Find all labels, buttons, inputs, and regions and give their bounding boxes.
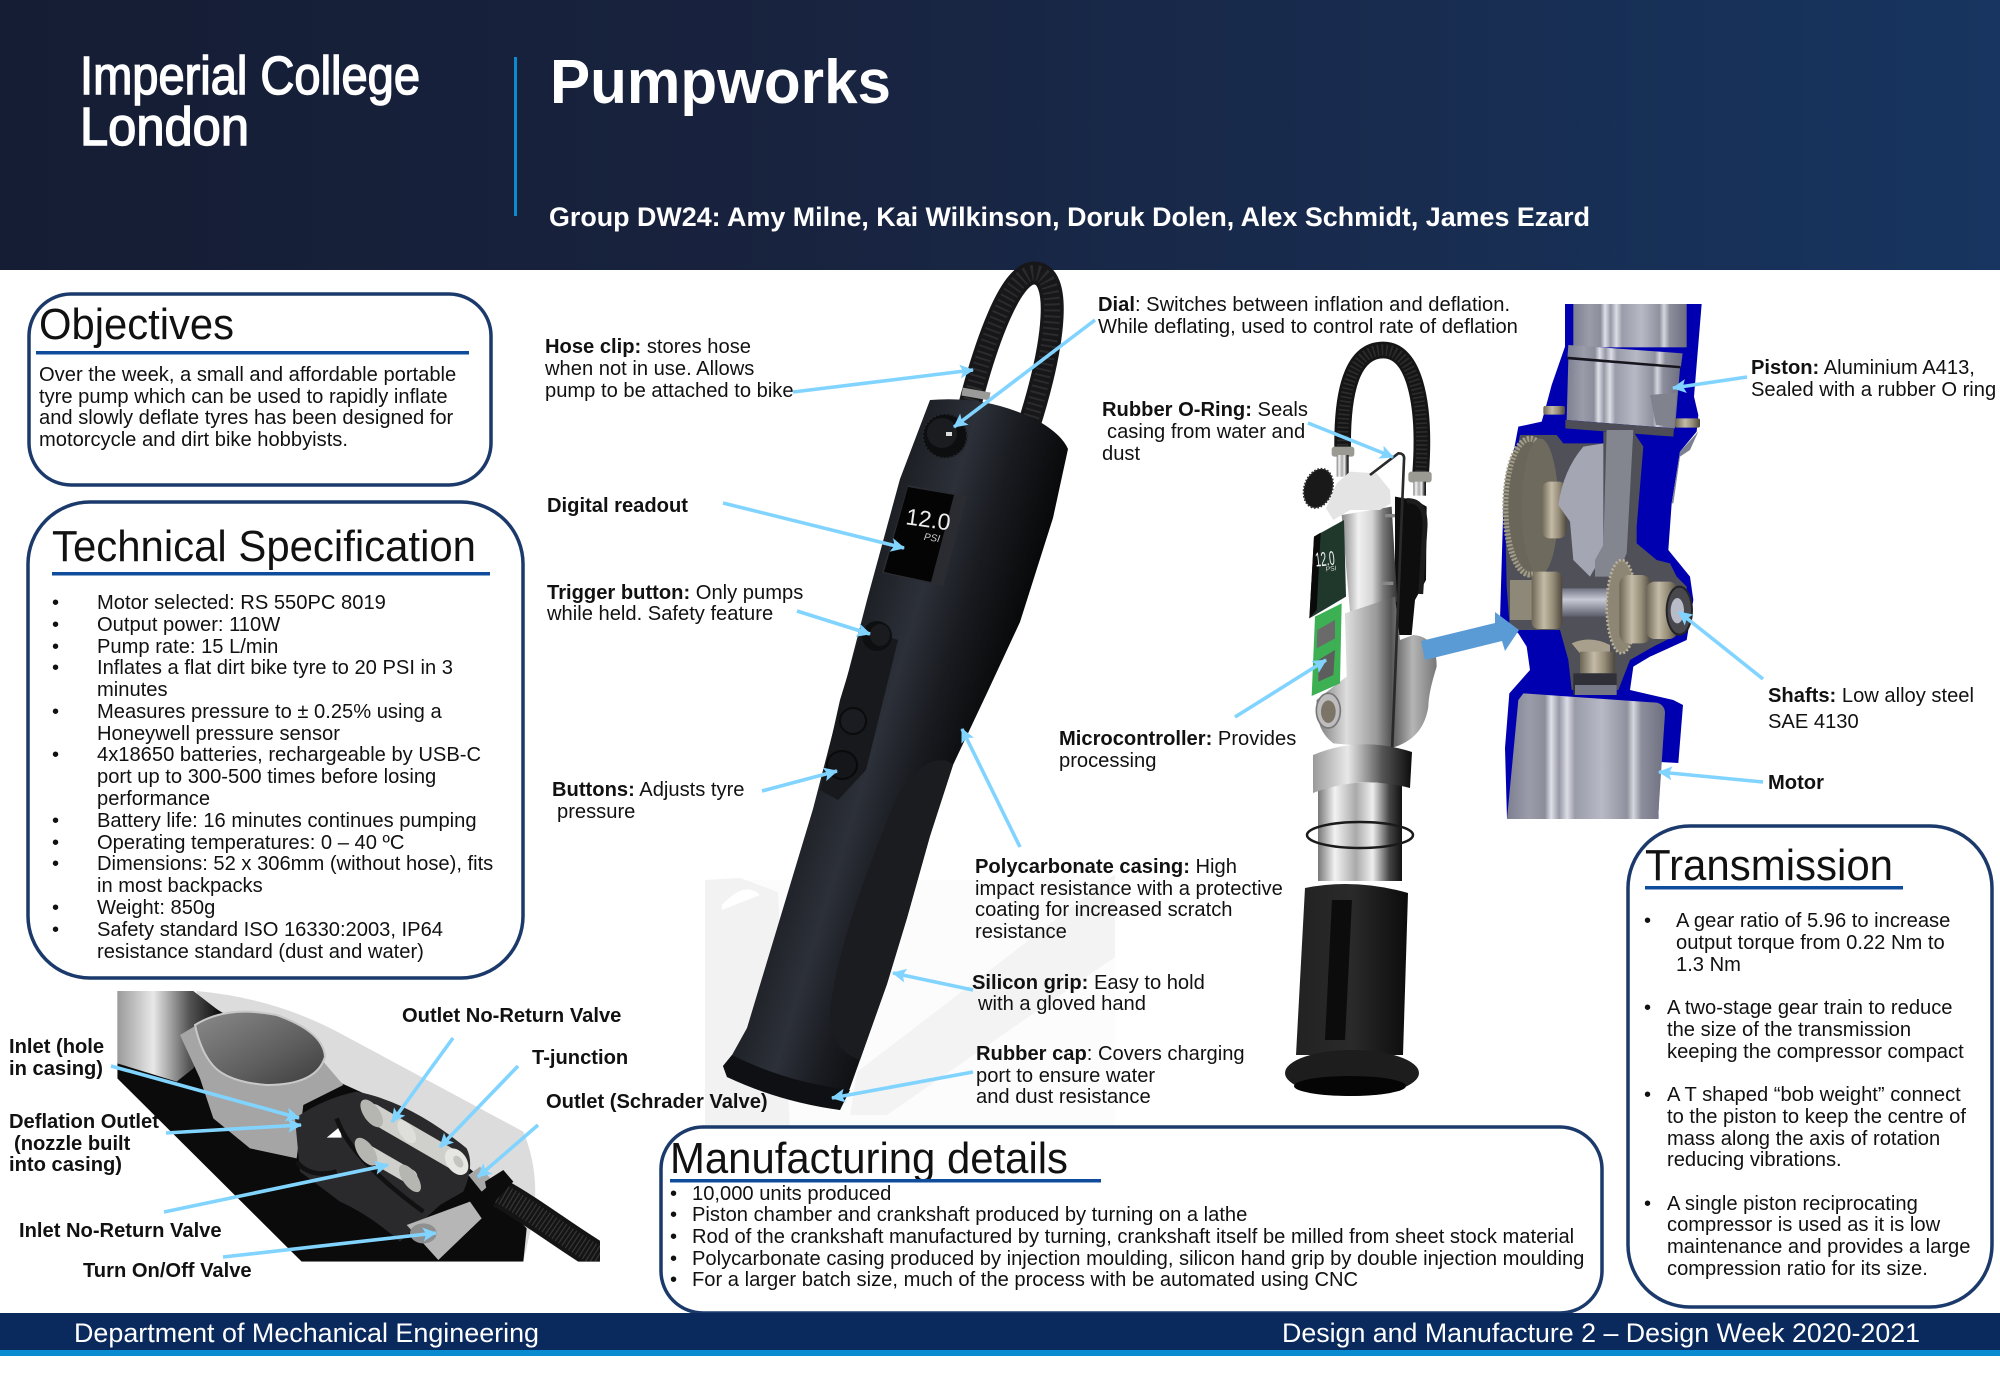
spec bullets: • [52,744,59,766]
callout: deflation outlet: (nozzle built [14,1133,131,1155]
callout: outlet no-return valve: Outlet No-Return Valve [402,1005,621,1027]
callout: deflation outlet: Deflation Outlet [9,1111,159,1133]
callout: inlet: Inlet (hole [9,1036,104,1058]
callout: shafts: SAE 4130 [1768,711,1859,733]
manufacturing heading: Manufacturing details [670,1134,1068,1183]
transmission bullets: compressor is used as it is low [1667,1214,1941,1236]
internal hose [1332,350,1432,496]
microcontroller board [1312,603,1342,696]
spec bullets: Honeywell pressure sensor [97,723,340,745]
manufacturing bullets: Piston chamber and crankshaft produced by turning on a lathe [692,1204,1247,1226]
callout: motor [1659,772,1824,794]
spec bullets: • [52,614,59,636]
group members: Group DW24: Amy Milne, Kai Wilkinson, Doruk Dolen, Alex Schmidt, James Ezard [549,202,1590,232]
spec bullets: • [52,897,59,919]
digital readout screen [882,485,967,586]
transmission heading: Transmission [1645,841,1893,890]
callouts: main pump [544,294,1518,1108]
screen module: PSI [1325,565,1337,573]
spec bullets: • [52,832,59,854]
callout: piston [1673,357,1996,401]
department: Department of Mechanical Engineering [74,1318,539,1348]
digital readout screen: 12.0 [904,503,952,535]
manufacturing bullets: 10,000 units produced [692,1183,891,1205]
spec bullets: performance [97,788,210,810]
college logo wordmark [80,46,420,157]
spec bullets: Safety standard ISO 16330:2003, IP64 [97,919,443,941]
transmission bullets: A gear ratio of 5.96 to increase [1676,910,1950,932]
dial [1299,465,1338,512]
callout: silicon grip: Silicon grip: Easy to hold [972,972,1205,994]
silicon grip [830,760,953,1060]
course and date: Design and Manufacture 2 – Design Week 2020-2021 [1282,1318,1920,1348]
spec bullets: • [52,919,59,941]
callout: digital readout: Digital readout [547,495,688,517]
manifold [295,1092,470,1242]
spec bullets: minutes [97,679,168,701]
compressor cylinder [1342,507,1397,612]
objectives text: motorcycle and dirt bike hobbyists. [39,429,348,451]
spec bullets: Battery life: 16 minutes continues pumping [97,810,477,832]
callout: deflation outlet: into casing) [9,1154,122,1176]
callout: hose clip [544,336,973,402]
college logo wordmark: Imperial College [80,46,420,106]
manufacturing bullets: For a larger batch size, much of the process with be automated using CNC [692,1269,1358,1291]
panel: technical specification [28,502,523,978]
callout: t-junction [440,1047,628,1147]
callout: microcontroller: Microcontroller: Provides [1059,728,1296,750]
transmission bullets: output torque from 0.22 Nm to [1676,932,1945,954]
callout: deflation outlet [9,1111,301,1176]
callout: rubber cap [832,1043,1245,1108]
transmission bullets: reducing vibrations. [1667,1149,1842,1171]
manufacturing bullets: • [670,1204,677,1226]
transmission bullets: • [1644,1193,1651,1215]
callout: hose clip: when not in use. Allows [544,358,754,380]
callout: inlet: in casing) [9,1058,103,1080]
callout: hose clip: pump to be attached to bike [545,380,794,402]
arrow between internals and cross-section [1421,612,1519,660]
lower motor housing and battery sleeve [1285,744,1419,1096]
screen module: 12.0 [1314,548,1336,572]
callout: rubber cap: port to ensure water [976,1065,1155,1087]
casing [723,399,1068,1110]
faint backdrop behind pump [705,874,1115,1130]
callout: polycarbonate casing [962,729,1283,943]
transmission bullets: A single piston reciprocating [1667,1193,1918,1215]
callout: o-ring [1102,399,1393,465]
motor stub [117,991,220,1082]
callouts: valve detail [9,1005,768,1282]
manufacturing bullets: • [670,1269,677,1291]
callout: shafts: Shafts: Low alloy steel [1768,685,1974,707]
spec bullets: • [52,657,59,679]
objectives heading: Objectives [39,300,234,349]
hose loop [962,273,1052,428]
spec bullets: Inflates a flat dirt bike tyre to 20 PSI in 3 [97,657,453,679]
spec bullets: port up to 300-500 times before losing [97,766,436,788]
callout: motor: Motor [1768,772,1824,794]
callout: polycarbonate casing: resistance [975,921,1067,943]
spec bullets: Motor selected: RS 550PC 8019 [97,592,386,614]
callout: inlet [9,1036,299,1118]
callout: polycarbonate casing: Polycarbonate casing: High [975,856,1237,878]
callout: piston: Piston: Aluminium A413, [1751,357,1975,379]
callout: o-ring: Rubber O-Ring: Seals [1102,399,1308,421]
transmission bullets: keeping the compressor compact [1667,1041,1964,1063]
callout: microcontroller: processing [1059,750,1156,772]
callout: turn on/off valve [83,1233,436,1282]
compressor head [180,1012,343,1158]
callout: microcontroller [1059,660,1326,772]
footer band [0,1313,2000,1356]
crank case [1317,597,1437,748]
callout: turn on/off valve: Turn On/Off Valve [83,1260,252,1282]
transmission bullets: A two-stage gear train to reduce [1667,997,1952,1019]
no-return valves [354,1100,468,1192]
spec bullets: • [52,701,59,723]
objectives text: and slowly deflate tyres has been designed for [39,407,454,429]
objectives text: Over the week, a small and affordable portable [39,364,456,386]
transmission bullets: the size of the transmission [1667,1019,1911,1041]
main pump render [723,273,1068,1110]
on-off valve plate [407,1202,482,1260]
callout: buttons: Buttons: Adjusts tyre [552,779,744,801]
title: Pumpworks [550,48,891,117]
objectives text [39,364,456,451]
spec bullets: Pump rate: 15 L/min [97,636,278,658]
interior cavity [1505,432,1687,690]
transmission bullets: maintenance and provides a large [1667,1236,1970,1258]
callout: o-ring: casing from water and [1107,421,1305,443]
objectives text: tyre pump which can be used to rapidly inflate [39,386,448,408]
piston [1543,304,1700,437]
charging port [1316,693,1340,728]
callout: outlet schrader [478,1091,768,1177]
motor [1507,693,1665,819]
callout: outlet no-return valve [392,1005,621,1122]
spec bullets: Weight: 850g [97,897,215,919]
dial [923,414,967,458]
transmission bullets: to the piston to keep the centre of [1667,1106,1966,1128]
callout: trigger: while held. Safety feature [546,603,773,625]
callout: inlet no-return valve: Inlet No-Return Valve [19,1220,222,1242]
callout: dial [954,294,1518,427]
spec bullets: • [52,592,59,614]
callout: inlet no-return valve [19,1165,388,1242]
callout: rubber cap: and dust resistance [976,1086,1151,1108]
callout: rubber cap: Rubber cap: Covers charging [976,1043,1245,1065]
manufacturing bullets: • [670,1183,677,1205]
spec heading: Technical Specification [52,522,476,571]
spec bullets [52,592,493,963]
callout: o-ring: dust [1102,443,1140,465]
callout: silicon grip: with a gloved hand [977,993,1146,1015]
header banner [0,0,2000,270]
rubber cap [723,1055,850,1110]
panel: objectives [29,294,491,485]
transmission bullets: • [1644,910,1651,932]
callout: polycarbonate casing: coating for increased scratch [975,899,1232,921]
crank and con rod [1558,430,1633,577]
callout: trigger [546,582,870,634]
transmission bullets: compression ratio for its size. [1667,1258,1928,1280]
transmission bullets: A T shaped “bob weight” connect [1667,1084,1961,1106]
transmission bullets: • [1644,997,1651,1019]
callout: outlet schrader: Outlet (Schrader Valve) [546,1091,768,1113]
pinion and bearings [1510,560,1692,653]
callout: polycarbonate casing: impact resistance with a protective [975,878,1283,900]
manufacturing bullets: • [670,1226,677,1248]
upper assembly [1299,350,1437,760]
callout: buttons [552,771,837,823]
spec bullets: in most backpacks [97,875,263,897]
spec bullets: Output power: 110W [97,614,280,636]
exploded internals render [1285,350,1437,1096]
housing [1500,304,1702,819]
bevel gear and motor shaft [1572,640,1617,695]
callout: piston: Sealed with a rubber O ring [1751,379,1996,401]
transmission bullets: 1.3 Nm [1676,954,1741,976]
callout: buttons: pressure [557,801,635,823]
callout: digital readout [547,495,904,548]
callout: dial: Dial: Switches between inflation and deflation. [1098,294,1510,316]
callout: shafts [1679,612,1974,733]
spec bullets: • [52,810,59,832]
internal valve detail render [117,991,603,1262]
callouts: internals [1059,357,1996,794]
manufacturing bullets: Rod of the crankshaft manufactured by turning, crankshaft itself be milled from sheet stock material [692,1226,1574,1248]
digital readout screen: PSI [923,532,941,545]
spec bullets: • [52,853,59,875]
spec bullets: • [52,636,59,658]
screen module [1309,520,1346,618]
spec bullets: 4x18650 batteries, rechargeable by USB-C [97,744,481,766]
spec bullets: Operating temperatures: 0 – 40 ºC [97,832,404,854]
callout: dial: While deflating, used to control rate of deflation [1098,316,1518,338]
manifold block [1326,472,1391,520]
callout: trigger: Trigger button: Only pumps [547,582,803,604]
rear electronics [1395,497,1427,635]
manufacturing bullets: • [670,1248,677,1270]
callout: silicon grip [893,972,1205,1015]
spec bullets: resistance standard (dust and water) [97,941,424,963]
large gear [1503,436,1567,577]
transmission bullets: mass along the axis of rotation [1667,1128,1940,1150]
panel: transmission [1628,826,1992,1307]
spec bullets: Measures pressure to ± 0.25% using a [97,701,442,723]
callout: t-junction: T-junction [532,1047,628,1069]
manufacturing bullets [670,1183,1584,1291]
spec bullets: Dimensions: 52 x 306mm (without hose), fits [97,853,493,875]
panel: manufacturing details [661,1127,1602,1313]
cross-section of transmission [1500,304,1702,819]
callout: hose clip: Hose clip: stores hose [545,336,751,358]
transmission bullets [1644,910,1970,1280]
control panel with buttons [820,621,898,800]
manufacturing bullets: Polycarbonate casing produced by injection moulding, silicon hand grip by double injection moulding [692,1248,1584,1270]
transmission bullets: • [1644,1084,1651,1106]
outlet hose [468,1167,603,1260]
college logo wordmark: London [80,97,249,157]
